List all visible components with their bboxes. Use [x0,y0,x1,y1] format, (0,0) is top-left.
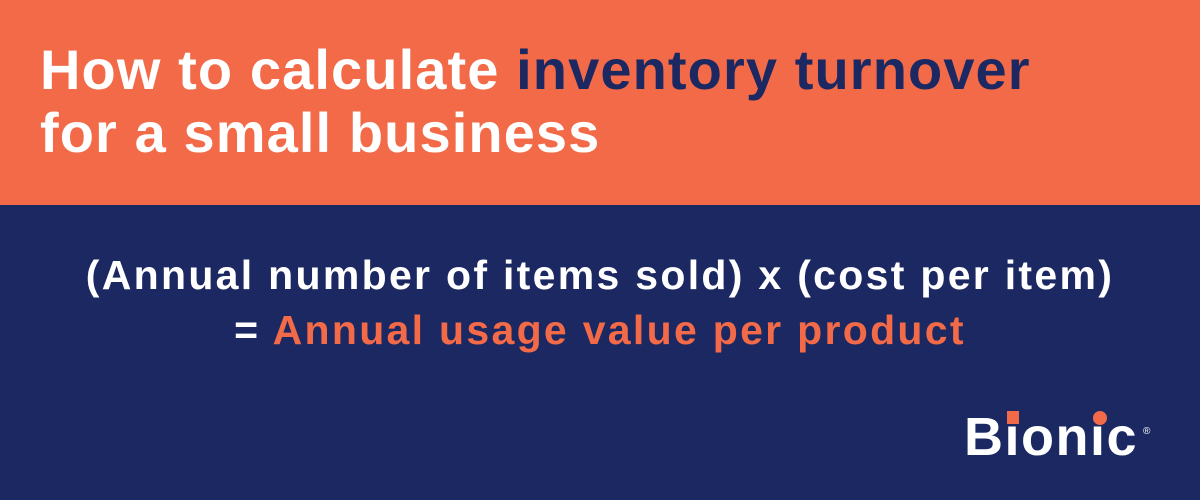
logo: Bionic: ® [1143,426,1150,437]
title: for a small business [40,101,600,164]
title [40,38,1031,164]
logo: Bionic: Bionic [964,407,1138,467]
header band [0,0,1200,205]
formula: (Annual number of items sold) x (cost per item) [86,252,1114,298]
formula: = Annual usage value per product [234,307,966,353]
title: How to calculate inventory turnover [40,38,1031,101]
formula [86,252,1114,353]
